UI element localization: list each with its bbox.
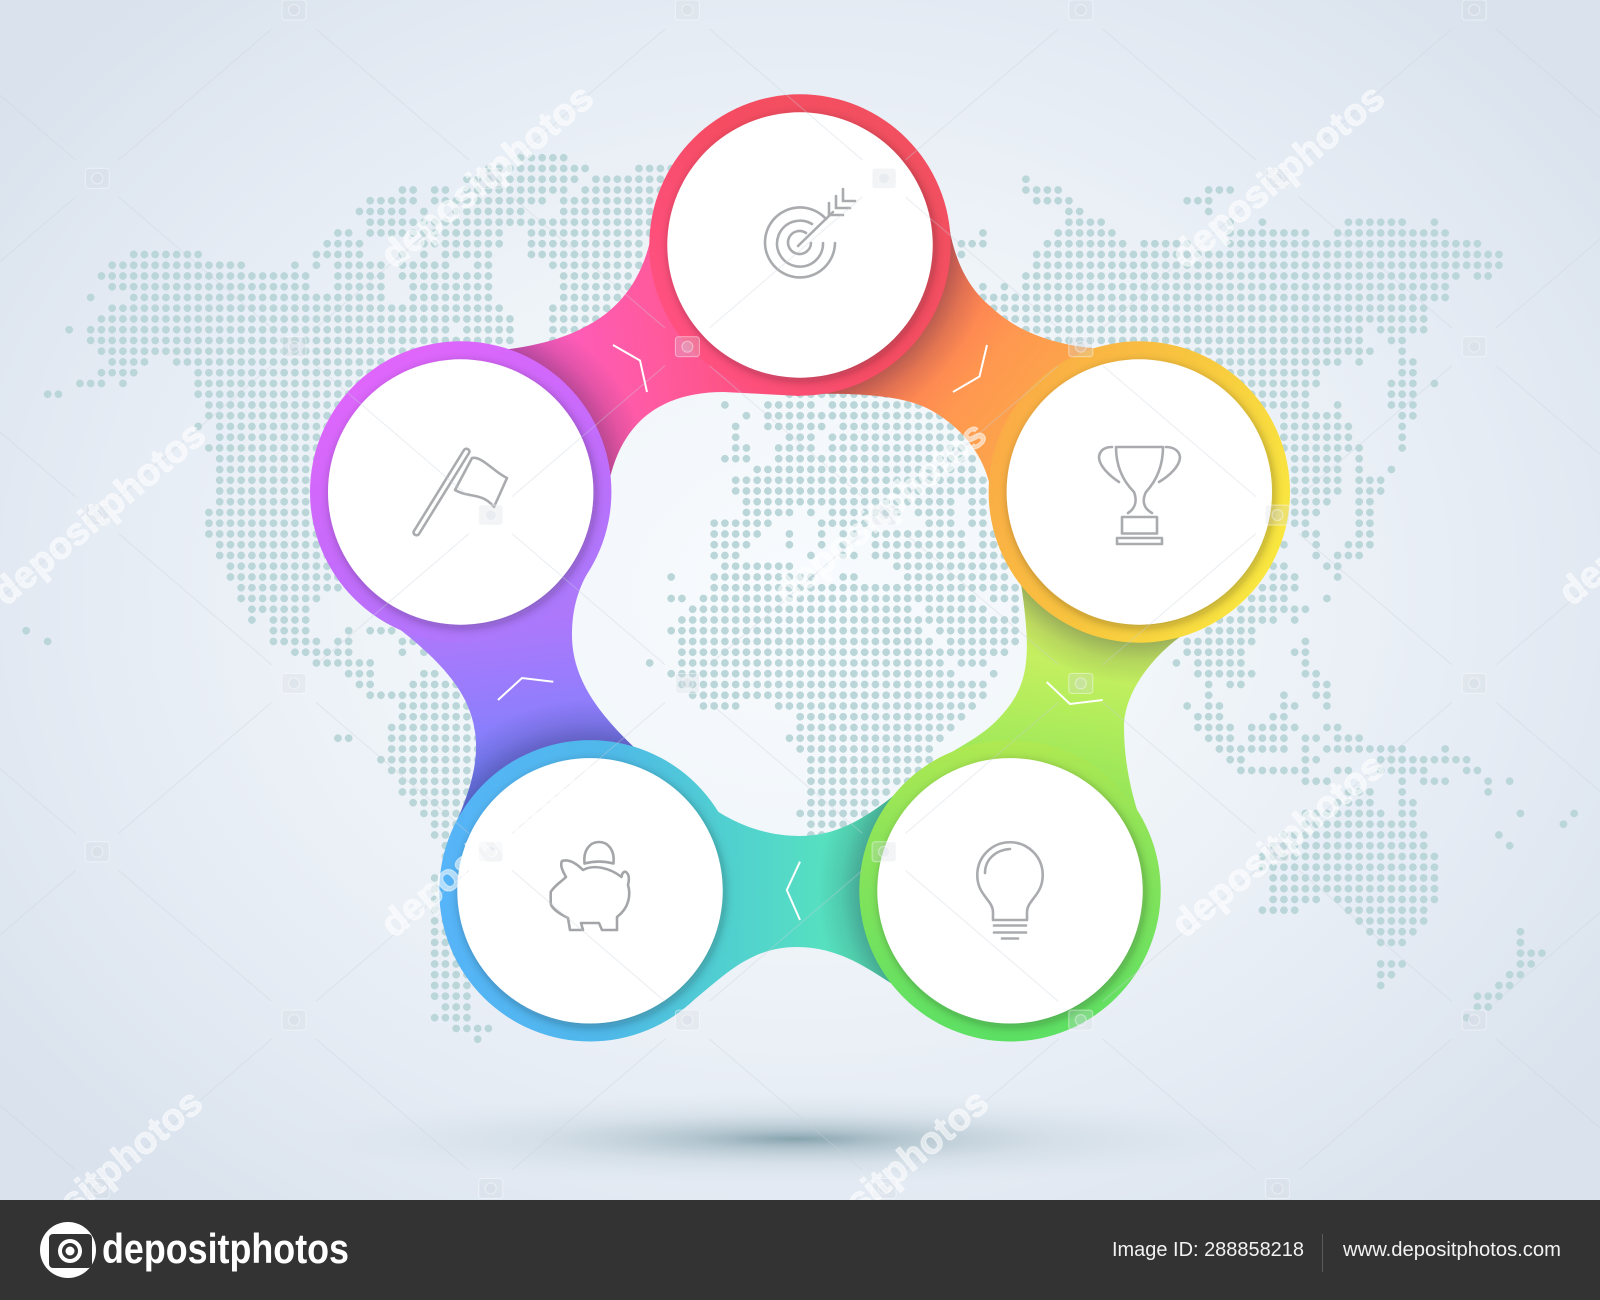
- node: red target: [649, 94, 951, 396]
- logo wordmark: depositphotos: [102, 1225, 349, 1272]
- dotted world map: [26, 158, 1574, 1039]
- watermark text: depositphotos: [1164, 745, 1393, 946]
- band: blue to green (teal): [692, 796, 893, 1001]
- image id: Image ID: 288858218: [1112, 1239, 1304, 1261]
- logo icon: camera: [40, 1222, 96, 1278]
- node: green bulb: [859, 740, 1161, 1042]
- watermark text: depositphotos: [1164, 76, 1393, 277]
- arrow: lime chevron: [1047, 682, 1103, 704]
- footer bar: [0, 1200, 1600, 1300]
- node: blue piggy bank: [439, 740, 741, 1042]
- watermark text: depositphotos: [373, 76, 602, 277]
- site url: www.depositphotos.com: [1342, 1239, 1561, 1261]
- band: yellow to red (orange): [822, 232, 1094, 482]
- watermark text: depositphotos: [373, 745, 602, 946]
- watermark text: depositphotos: [766, 413, 995, 614]
- band: red to purple (pink): [508, 244, 800, 476]
- node: yellow trophy: [989, 341, 1290, 643]
- arrow: violet chevron: [498, 678, 553, 700]
- arrow: orange chevron: [953, 345, 987, 392]
- icon: piggy bank: [551, 842, 629, 930]
- band: purple to blue (violet): [400, 574, 634, 820]
- band: green to yellow (lime): [951, 586, 1180, 810]
- icon: light bulb: [977, 842, 1043, 938]
- icon: flag: [414, 449, 507, 535]
- arrow: pink chevron: [613, 345, 647, 392]
- watermark text: depositphotos: [768, 1081, 997, 1282]
- icon: trophy: [1099, 447, 1180, 544]
- node: purple flag: [310, 341, 611, 643]
- ground shadow: [305, 1093, 1285, 1185]
- arrow: teal chevron: [787, 862, 800, 920]
- icon: target: [765, 189, 855, 277]
